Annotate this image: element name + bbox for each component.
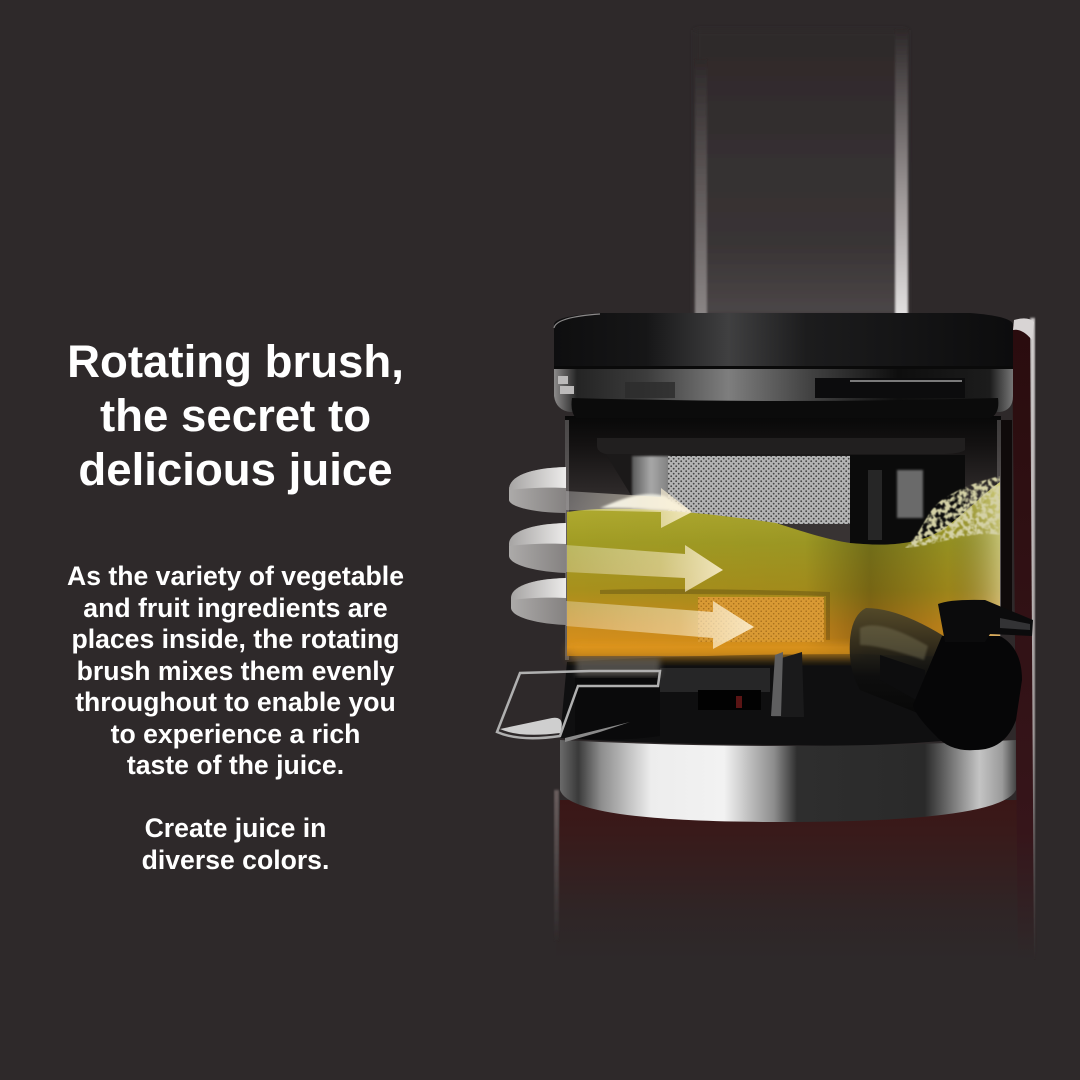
title: delicious juice	[78, 444, 393, 495]
title	[67, 336, 404, 495]
strainer posts	[850, 455, 965, 545]
body text	[67, 561, 404, 780]
title: the secret to	[100, 390, 371, 441]
body text: As the variety of vegetable	[67, 561, 404, 591]
closing text: Create juice in	[145, 813, 326, 843]
body text: taste of the juice.	[127, 750, 344, 780]
froth left	[600, 494, 690, 512]
body text: and fruit ingredients are	[83, 592, 388, 622]
arrow rings	[509, 467, 566, 625]
body text: brush mixes them evenly	[77, 656, 394, 686]
base dark ring	[560, 646, 1000, 746]
ring 3	[511, 578, 566, 625]
dark inner frame	[600, 589, 830, 640]
body text: places inside, the rotating	[71, 624, 400, 654]
strainer side left	[632, 456, 670, 514]
ring 2	[509, 523, 566, 573]
arrow 1	[566, 488, 692, 528]
body text: to experience a rich	[111, 718, 360, 748]
arrow 3	[566, 601, 754, 649]
closing text: diverse colors.	[142, 844, 329, 874]
strainer rim	[597, 438, 965, 454]
flow arrows	[566, 488, 754, 649]
ring 1	[509, 467, 566, 513]
juice outlet	[850, 600, 1033, 750]
title: Rotating brush,	[67, 336, 404, 387]
lid	[554, 313, 1013, 418]
lower strainer mesh	[698, 597, 824, 642]
metal collar	[560, 740, 1016, 822]
spout handle	[497, 658, 660, 742]
body base	[554, 318, 1038, 960]
feed chute	[695, 30, 908, 315]
froth	[905, 476, 1000, 548]
juice	[567, 476, 1000, 656]
body text: throughout to enable you	[75, 687, 396, 717]
glass chamber	[565, 416, 1012, 660]
arrow 2	[566, 545, 723, 592]
strainer cone	[606, 454, 850, 510]
closing text	[142, 813, 329, 874]
strainer mesh	[668, 456, 850, 524]
